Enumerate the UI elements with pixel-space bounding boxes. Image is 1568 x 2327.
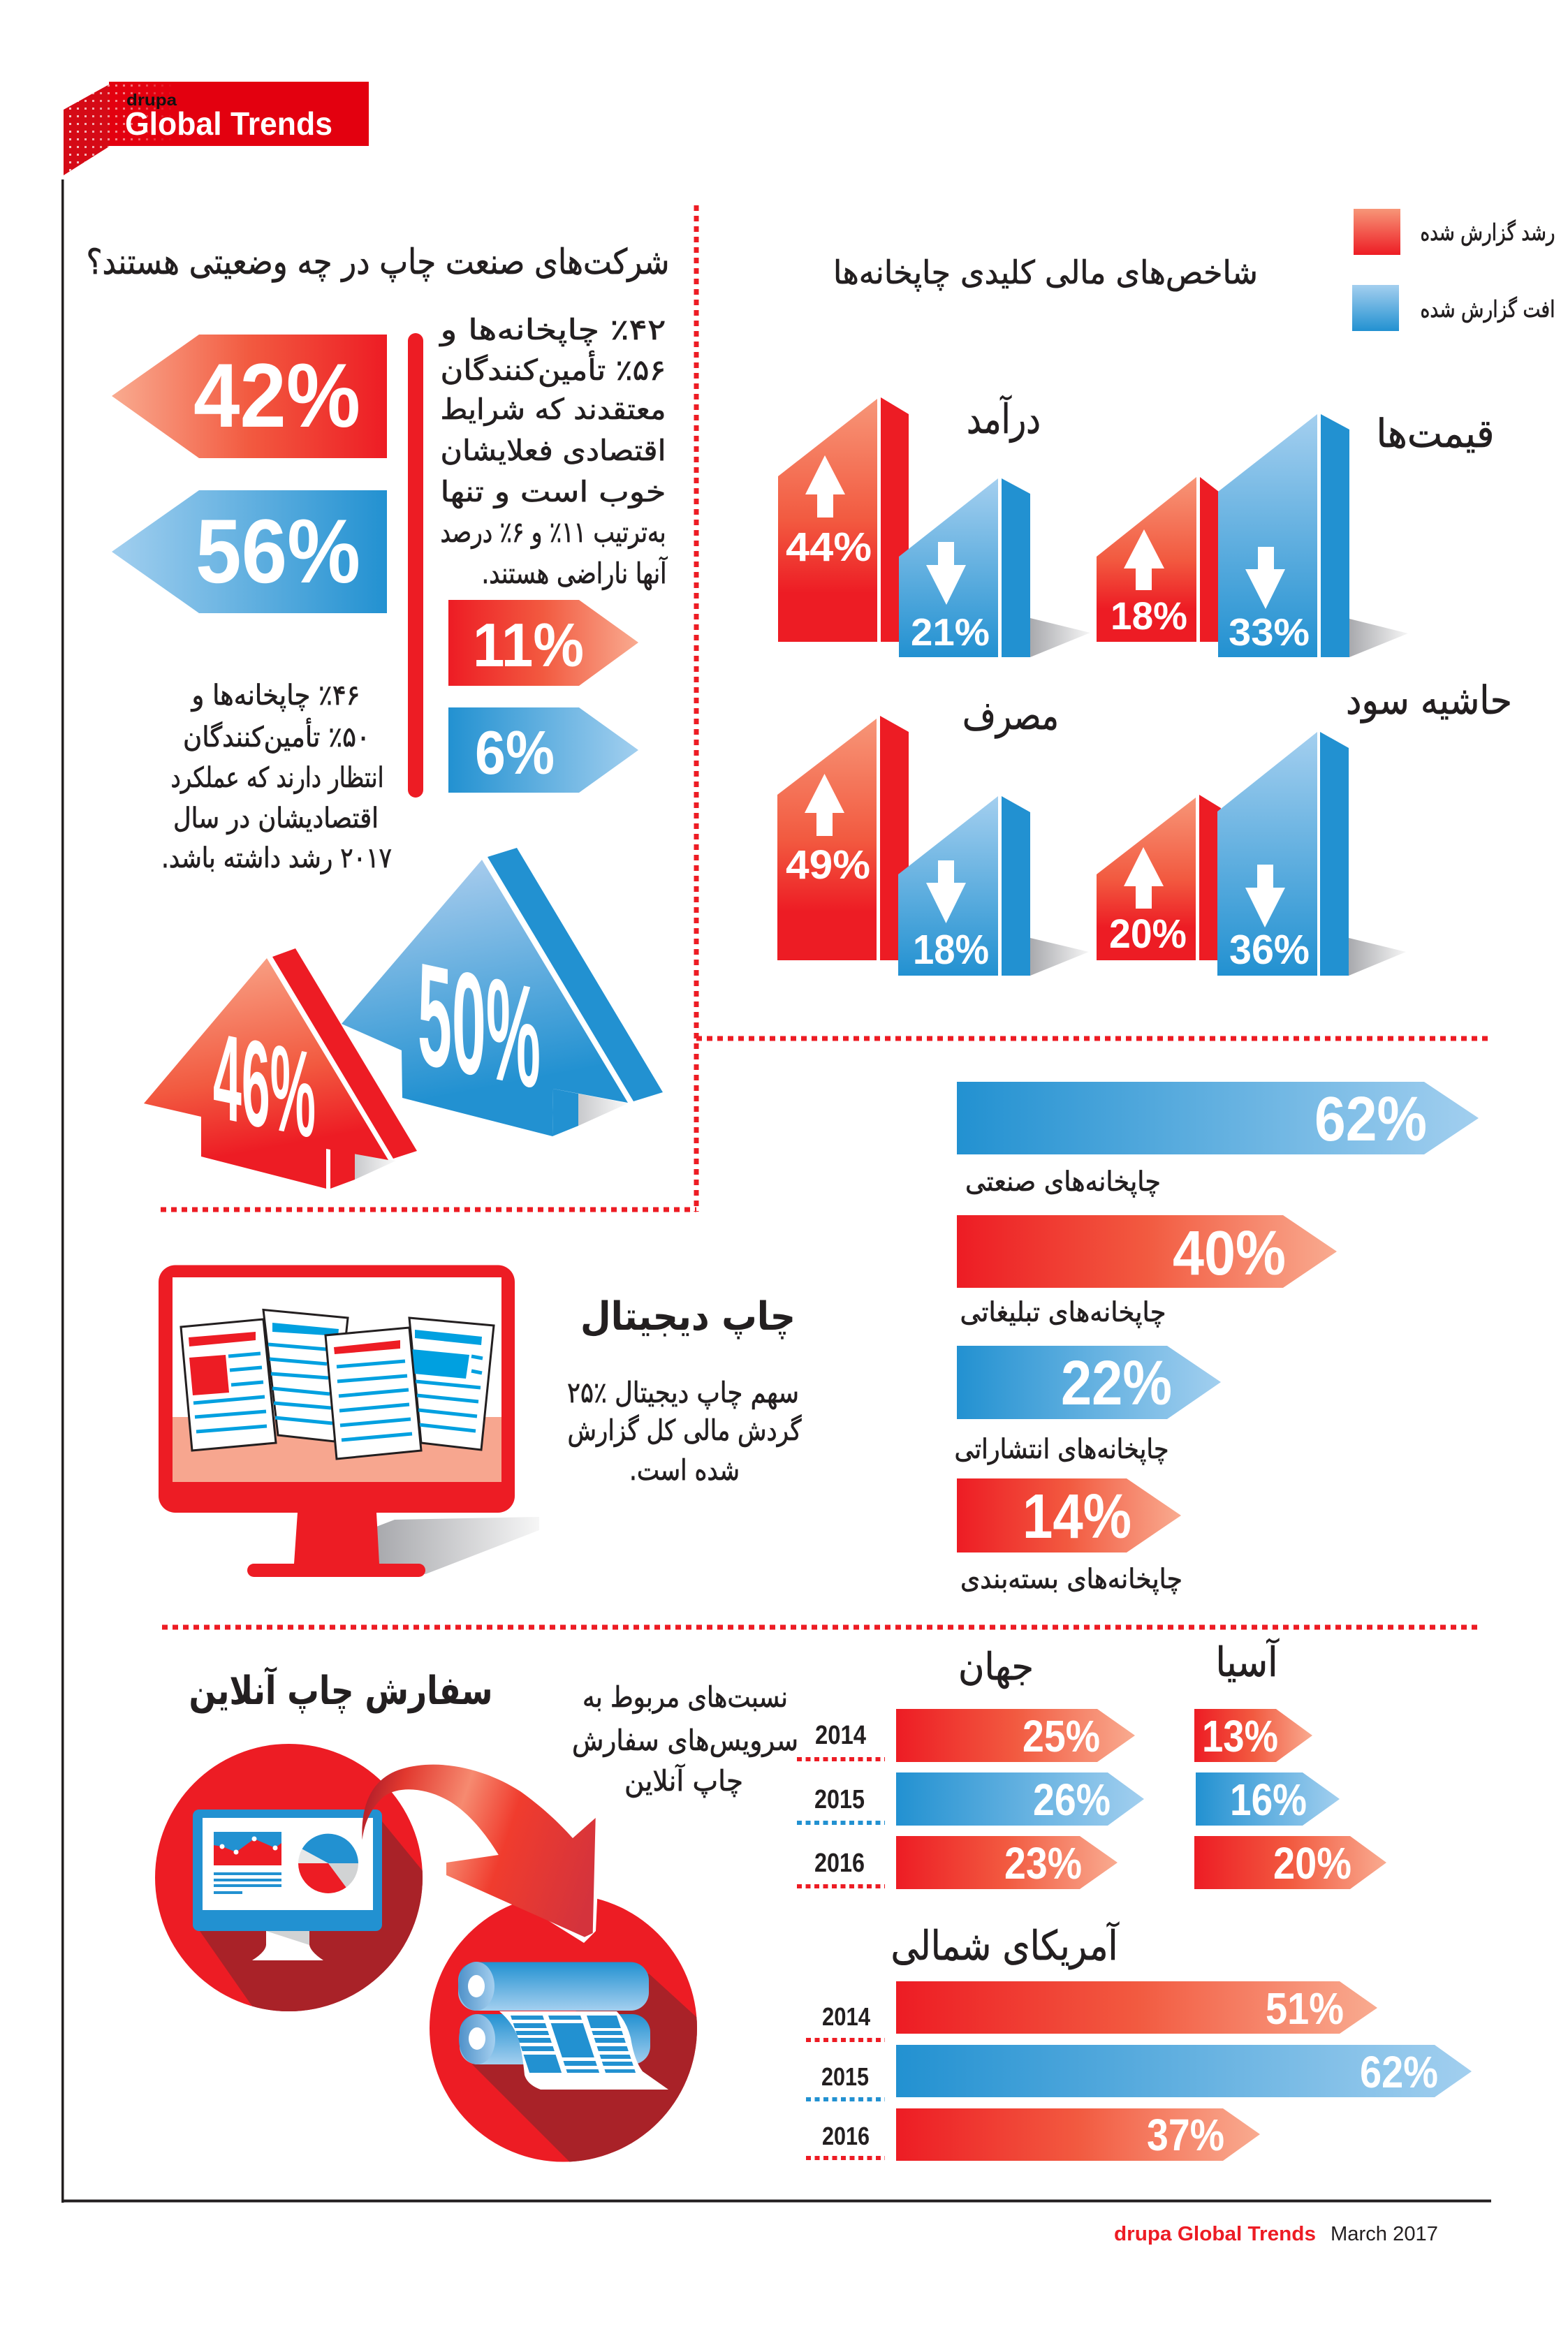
panel: digital printing share by printer type <box>954 1082 1479 1595</box>
bar: publishing printers 22%: چاپخانه‌های انتشاراتی <box>954 1434 1169 1465</box>
text block: 2017 expectation: ٪۴۶ چاپخانه‌ها و <box>191 680 360 712</box>
year labels: world and Asia <box>797 1721 885 1886</box>
arrow: 56% <box>112 490 387 613</box>
chart: revenue: درآمد <box>967 395 1041 443</box>
logo: drupa Global Trends: drupa <box>126 91 177 109</box>
arrow: 11%: 11% <box>473 610 584 680</box>
heading: digital printing: چاپ دیجیتال <box>580 1294 796 1339</box>
chart: Asia <box>1194 1638 1386 1889</box>
year labels: world and Asia: 2015 <box>814 1785 865 1814</box>
bar: publishing printers 22% <box>954 1346 1221 1465</box>
icon: computer circle <box>155 1744 433 2025</box>
legend: reported growth <box>1354 209 1555 255</box>
panel: digital printing <box>159 1265 802 1577</box>
chart: Asia: 20% <box>1273 1838 1351 1888</box>
vertical red divider <box>408 333 423 798</box>
chart: profit margin: حاشیه سود <box>1346 678 1512 724</box>
text block: 2017 expectation <box>161 680 392 874</box>
panel: regional online print charts <box>797 1638 1472 2161</box>
chart: prices: 18% <box>1111 594 1187 638</box>
chart: revenue <box>778 395 1090 657</box>
chart: North America <box>806 1921 1472 2161</box>
chart: revenue: 44% <box>786 524 872 570</box>
chart: world: 25% <box>1023 1711 1100 1761</box>
chart: consumption: مصرف <box>962 693 1059 739</box>
3D arrow: 46% <box>144 948 417 1189</box>
text block: rates: چاپ آنلاین <box>624 1763 743 1798</box>
bar: industrial printers 62%: 62% <box>1314 1085 1427 1154</box>
text block: 2017 expectation: اقتصادیشان در سال <box>173 802 379 835</box>
arrow: computer to press <box>362 1765 598 1943</box>
text block: digital share: گردش مالی کل گزارش <box>567 1414 802 1447</box>
text block: current economy: ٪۴۲ چاپخانه‌ها و <box>439 313 666 347</box>
bar: industrial printers 62%: چاپخانه‌های صنعتی <box>965 1166 1161 1198</box>
arrow: 56%: 56% <box>196 500 360 602</box>
chart: world <box>896 1645 1144 1889</box>
chart: Asia: 16% <box>1230 1775 1307 1825</box>
bar: packaging printers 14% <box>957 1478 1182 1595</box>
icon: press rollers circle <box>430 1898 697 2162</box>
arrow: 42%: 42% <box>193 344 360 446</box>
3D arrow: 50% <box>342 848 663 1136</box>
chart: consumption <box>777 693 1089 976</box>
chart: revenue: 21% <box>911 610 990 654</box>
bar: commercial printers 40%: 40% <box>1173 1219 1286 1289</box>
chart: consumption: 49% <box>786 842 870 888</box>
chart: Asia: 13% <box>1202 1711 1278 1761</box>
chart: North America: آمریکای شمالی <box>891 1921 1120 1970</box>
chart: Asia: آسیا <box>1215 1638 1280 1686</box>
chart: North America: 2016 <box>822 2122 870 2150</box>
bar: packaging printers 14%: 14% <box>1023 1482 1131 1552</box>
text block: current economy: اقتصادی فعلایشان <box>440 434 666 467</box>
text block: current economy: به‌ترتیب ۱۱٪ و ۶٪ درصد <box>440 515 666 549</box>
footer: drupa Global Trends <box>1114 2223 1316 2245</box>
text block: 2017 expectation: انتظار دارند که عملکرد <box>170 762 384 794</box>
logo: drupa Global Trends: Global Trends <box>125 105 332 142</box>
text block: digital share: سهم چاپ دیجیتال ٪۲۵ <box>567 1376 799 1409</box>
3D arrow: 46%: 46% <box>213 1007 316 1164</box>
heading: key indicators: شاخص‌های مالی کلیدی چاپخانه‌ها <box>833 254 1258 292</box>
logo: drupa Global Trends <box>64 82 369 179</box>
text block: digital share: شده است. <box>629 1453 740 1487</box>
year labels: world and Asia: 2016 <box>814 1849 865 1878</box>
icon: monitor with printed pages <box>159 1265 539 1577</box>
heading: online print ordering: سفارش چاپ آنلاین <box>189 1666 493 1714</box>
chart: profit margin: 36% <box>1229 927 1310 973</box>
chart: prices: قیمت‌ها <box>1376 411 1495 457</box>
text block: rates: سرویس‌های سفارش <box>572 1724 798 1757</box>
chart: world: 26% <box>1033 1775 1111 1825</box>
chart: world: 23% <box>1004 1838 1082 1888</box>
panel: companies status <box>87 242 669 1189</box>
panel: key financial indicators <box>777 209 1555 976</box>
text block: digital share <box>567 1376 802 1487</box>
bar: publishing printers 22%: 22% <box>1061 1349 1172 1418</box>
chart: North America: 51% <box>1266 1983 1344 2034</box>
chart: North America: 62% <box>1360 2047 1438 2097</box>
bar: industrial printers 62% <box>957 1082 1479 1198</box>
text block: current economy <box>439 313 668 590</box>
arrow: 6% <box>448 707 638 793</box>
text block: current economy: آنها ناراضی هستند. <box>482 556 668 590</box>
text block: 2017 expectation: ٪۵۰ تأمین‌کنندگان <box>183 718 370 754</box>
panel: online print ordering <box>155 1666 798 2179</box>
arrow: 42% <box>112 335 387 458</box>
bar: packaging printers 14%: چاپخانه‌های بسته‌بندی <box>960 1564 1182 1595</box>
chart: profit margin <box>1097 678 1512 976</box>
legend: reported decline <box>1352 285 1555 331</box>
text block: rates <box>572 1680 798 1798</box>
bar: commercial printers 40% <box>957 1215 1337 1328</box>
chart: North America: 2014 <box>822 2002 870 2031</box>
chart: North America: 2015 <box>821 2062 869 2091</box>
arrow: 11% <box>448 600 638 686</box>
3D arrow: 50%: 50% <box>418 932 541 1120</box>
chart: prices <box>1097 411 1495 657</box>
text block: current economy: معتقدند که شرایط <box>440 392 666 426</box>
heading: companies status: شرکت‌های صنعت چاپ در چه وضعیتی هستند؟ <box>87 242 669 283</box>
arrow: 6%: 6% <box>475 718 555 787</box>
chart: North America: 37% <box>1147 2110 1224 2160</box>
chart: consumption: 18% <box>913 927 989 973</box>
chart: prices: 33% <box>1229 610 1310 654</box>
text block: current economy: ٪۵۶ تأمین‌کنندگان <box>440 351 666 387</box>
footer: March 2017 <box>1331 2223 1438 2245</box>
chart: world: جهان <box>958 1645 1034 1689</box>
year labels: world and Asia: 2014 <box>815 1721 866 1750</box>
page frame <box>61 179 1491 2203</box>
text block: rates: نسبت‌های مربوط به <box>582 1680 788 1714</box>
text block: current economy: خوب است و تنها <box>440 475 666 508</box>
bar: commercial printers 40%: چاپخانه‌های تبلیغاتی <box>960 1297 1166 1328</box>
chart: profit margin: 20% <box>1109 911 1187 957</box>
text block: 2017 expectation: ۲۰۱۷ رشد داشته باشد. <box>161 842 392 874</box>
dotted section dividers <box>161 205 1488 1627</box>
footer <box>1114 2223 1438 2245</box>
